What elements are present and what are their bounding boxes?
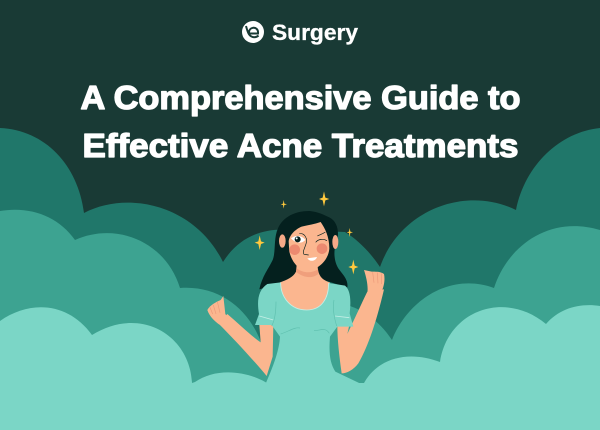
woman illustration: [207, 191, 384, 385]
finger lines: [210, 272, 381, 314]
sparkles: [255, 191, 358, 274]
cheeks: [289, 244, 300, 255]
right arm: [337, 289, 384, 373]
face: [289, 222, 329, 271]
dress trim: [259, 283, 349, 320]
dress folds: [272, 300, 337, 334]
title: [80, 79, 520, 164]
neck and chest: [279, 265, 332, 315]
wink, brow and nose: [299, 232, 327, 255]
hair: [259, 211, 347, 289]
ears: [279, 234, 286, 248]
left hand: [207, 296, 228, 325]
dress: [255, 282, 363, 385]
smile: [307, 257, 317, 261]
back cloud layer: [0, 128, 600, 430]
logo: Surgery: Surgery: [272, 20, 359, 45]
left arm: [218, 314, 273, 376]
eye: [291, 236, 305, 243]
title: A Comprehensive Guide to: [80, 79, 520, 116]
neck shadow: [296, 268, 318, 277]
middle cloud layer: [0, 210, 600, 430]
front cloud layer: [0, 305, 600, 430]
right hand: [364, 270, 384, 297]
title: Effective Acne Treatments: [82, 127, 518, 164]
